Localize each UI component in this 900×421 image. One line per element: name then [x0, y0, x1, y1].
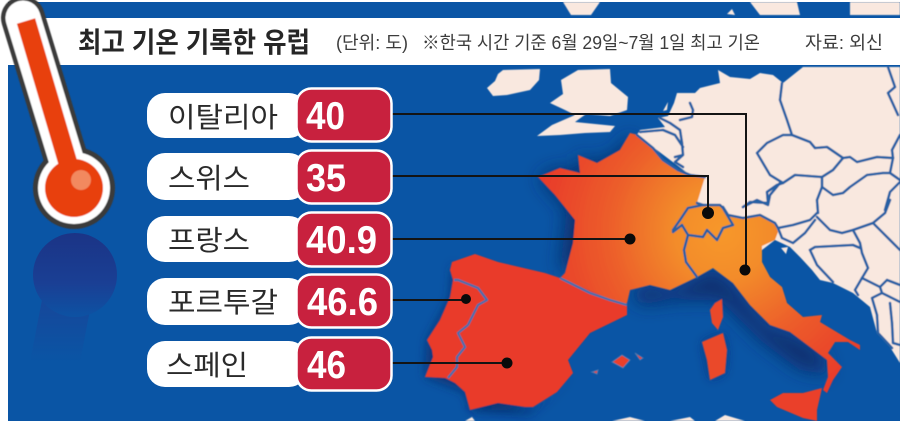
coastal shadows: [425, 133, 830, 415]
leader line: France: [392, 234, 636, 244]
row: Portugal 46.6: [147, 274, 392, 328]
country borders: [448, 67, 900, 378]
bottom land bits: [465, 415, 745, 421]
leader line: Italy: [392, 114, 750, 276]
row: Switzerland 35: 35: [306, 157, 346, 200]
time note: ※한국 시간 기준 6월 29일~7월 1일 최고 기온: [422, 33, 760, 53]
row: Portugal 46.6: 포르투갈: [168, 287, 278, 318]
row: France 40.9: 40.9: [306, 219, 377, 262]
thermometer shadow: [30, 233, 117, 362]
row: Spain 46: [147, 338, 392, 390]
row: Spain 46: 46: [307, 344, 346, 387]
row: Switzerland 35: 스위스: [168, 163, 250, 194]
top land strip: [563, 2, 900, 15]
Ireland: [487, 69, 540, 96]
France, Switzerland, Italy: [538, 133, 860, 393]
leader line: Portugal: [392, 294, 471, 304]
row: Italy 40: [147, 88, 392, 142]
Corsica and Sardinia: [702, 299, 727, 380]
source: 자료: 외신: [805, 33, 883, 53]
icon: thermometer: [23, 18, 115, 229]
title band: [0, 18, 900, 65]
row: Italy 40: 이탈리아: [168, 102, 278, 133]
row: Italy 40: 40: [306, 95, 345, 138]
row: Switzerland 35: [147, 150, 392, 204]
unit note: (단위: 도): [336, 33, 408, 53]
row: Portugal 46.6: 46.6: [307, 281, 378, 324]
row: Spain 46: 스페인: [166, 350, 248, 381]
continental Europe: [637, 67, 900, 363]
row: France 40.9: 프랑스: [168, 225, 250, 256]
row: France 40.9: [147, 212, 392, 266]
Britain: [537, 69, 628, 136]
Balearic islands: [592, 353, 643, 374]
Sicily: [770, 388, 822, 421]
leader line: Spain: [392, 358, 512, 368]
Iberia: [425, 254, 627, 410]
leader line: Switzerland: [392, 176, 714, 219]
small Adriatic island: [781, 247, 788, 254]
map of Europe: [425, 2, 900, 421]
title: 최고 기온 기록한 유럽: [78, 27, 310, 58]
Netherlands sliver: [663, 102, 668, 111]
